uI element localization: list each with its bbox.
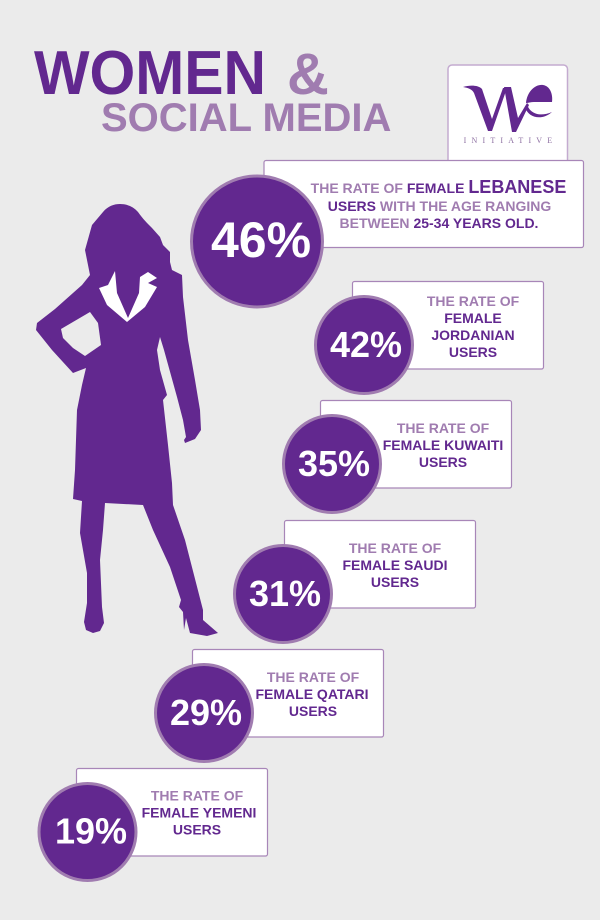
panel: 42% Jordanian: [316, 282, 544, 394]
stat: 46%: [192, 176, 322, 307]
label: Jordanian: THE RATE OF: [427, 293, 520, 309]
arm gap: [61, 312, 101, 356]
label: Qatari: FEMALE QATARI: [255, 686, 369, 702]
stat: 35%: 35%: [298, 443, 370, 484]
label: Kuwaiti: USERS: [419, 454, 467, 470]
panel: logo: [448, 65, 568, 165]
label: Qatari: [255, 669, 369, 719]
jacket lapels: [99, 271, 157, 322]
label: Yemeni: THE RATE OF: [151, 788, 244, 804]
stat: 29%: 29%: [170, 692, 242, 733]
label: Lebanese: THE RATE OF FEMALE LEBANESE: [311, 177, 566, 197]
panel: 19% Yemeni: [39, 768, 268, 880]
panel: 46% Lebanese: [192, 160, 584, 307]
label: Jordanian: JORDANIAN: [431, 327, 515, 343]
stat: 35%: [284, 416, 380, 512]
label: Saudi: [342, 540, 448, 590]
label: Kuwaiti: [383, 420, 503, 470]
stat: 42%: [316, 296, 412, 394]
label: Lebanese: [311, 177, 566, 231]
stat: 19%: 19%: [55, 810, 127, 852]
title: &: [287, 42, 329, 107]
icon: woman silhouette: [36, 204, 218, 636]
panel: 29% Qatari: [156, 650, 384, 762]
label: Saudi: FEMALE SAUDI: [342, 557, 448, 573]
title: WOMEN: [34, 39, 266, 108]
label: Saudi: USERS: [371, 574, 419, 590]
stat: 31%: [234, 546, 332, 642]
label: Jordanian: USERS: [449, 344, 497, 360]
stat: 19%: [39, 784, 136, 880]
panel: 31% Saudi: [234, 520, 476, 642]
stat: 31%: 31%: [249, 573, 321, 614]
label: Qatari: THE RATE OF: [267, 669, 360, 685]
title: [34, 39, 391, 140]
title: SOCIAL MEDIA: [101, 96, 391, 140]
label: Qatari: USERS: [289, 703, 337, 719]
stat: 42%: 42%: [330, 324, 402, 365]
label: Kuwaiti: FEMALE KUWAITI: [383, 437, 503, 453]
label: Jordanian: FEMALE: [444, 310, 502, 326]
label: Yemeni: [142, 788, 256, 838]
label: Yemeni: FEMALE YEMENI: [142, 804, 256, 820]
label: Lebanese: BETWEEN 25-34 YEARS OLD.: [340, 215, 538, 231]
label: Yemeni: USERS: [173, 822, 221, 838]
stat: 29%: [156, 664, 252, 762]
panel: 35% Kuwaiti: [284, 400, 512, 512]
logo wordmark: INITIATIVE: [464, 136, 557, 145]
label: Lebanese: USERS WITH THE AGE RANGING: [328, 198, 551, 214]
icon: WE logo mark: [463, 85, 552, 132]
label: Jordanian: [427, 293, 520, 360]
label: Saudi: THE RATE OF: [349, 540, 442, 556]
label: Kuwaiti: THE RATE OF: [397, 420, 490, 436]
stat: 46%: 46%: [211, 212, 311, 268]
